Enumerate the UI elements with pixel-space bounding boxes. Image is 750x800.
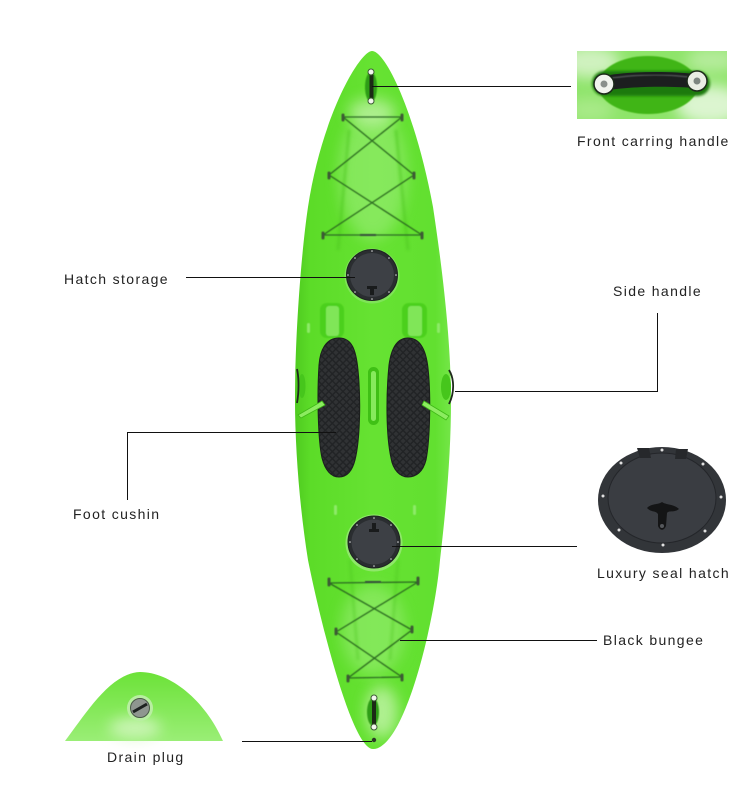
rear bungee cords [329, 578, 418, 681]
side handles [297, 369, 453, 404]
leader line: foot cushion [128, 432, 336, 500]
moulded seat recesses [307, 303, 440, 515]
drain plug on hull [372, 738, 376, 742]
front hatch [344, 248, 400, 304]
rear hatch [346, 514, 402, 572]
front carrying handle on hull [365, 69, 377, 104]
leader line: side handle [455, 313, 658, 392]
leader line: hatch storage [186, 276, 355, 278]
inset: luxury seal hatch [598, 447, 726, 553]
label: hatch storage: Hatch storage [64, 271, 169, 287]
leader line: black bungee [400, 640, 597, 642]
leader line: drain plug [242, 740, 372, 742]
foot cushion pads [318, 338, 430, 477]
kayak hull [295, 51, 453, 749]
paddle clips [298, 401, 449, 420]
label: front carring handle: Front carring handle [577, 133, 730, 149]
label: black bungee: Black bungee [603, 632, 704, 648]
kayak infographic [65, 51, 728, 765]
label: luxury seal hatch: Luxury seal hatch [597, 565, 730, 581]
centre slot [368, 367, 379, 425]
rear handle on hull [367, 695, 379, 730]
front bungee cords [323, 115, 422, 238]
label: side handle: Side handle [613, 283, 702, 299]
label: foot cushin: Foot cushin [73, 506, 160, 522]
inset: front carrying handle photo [577, 51, 727, 119]
label: drain plug: Drain plug [107, 749, 185, 765]
leader line: front handle [372, 86, 571, 88]
inset: drain plug [65, 672, 223, 741]
leader line: luxury seal hatch [392, 546, 577, 548]
